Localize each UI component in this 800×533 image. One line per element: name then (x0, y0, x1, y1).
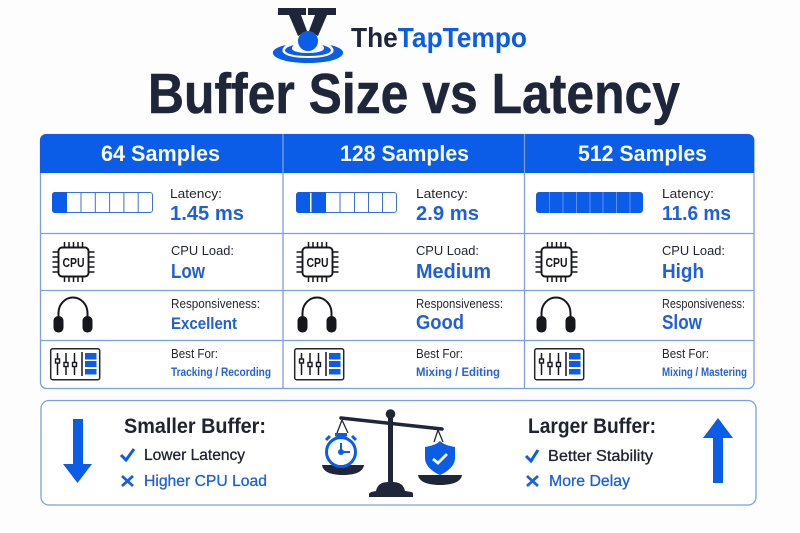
icon: headphones, 64 samples (54, 298, 92, 332)
panel: buffer trade-off summary (41, 400, 756, 505)
column header: 512 Samples: 512 Samples (578, 141, 707, 166)
cpu load text: 128 samples (416, 243, 491, 283)
cpu load text: 128 samples: CPU Load: (416, 243, 479, 258)
responsiveness text: 128 samples: Responsiveness: (416, 296, 503, 311)
responsiveness text: 64 samples: Responsiveness: (171, 296, 260, 311)
larger buffer text (526, 415, 656, 490)
logo mark (273, 8, 343, 63)
icon: mixer, 128 samples (295, 349, 344, 380)
best for text: 64 samples (171, 346, 271, 379)
responsiveness text: 512 samples: Slow (662, 312, 702, 334)
smaller buffer text: Lower Latency (144, 447, 245, 464)
cpu load text: 128 samples: Medium (416, 261, 491, 283)
best for text: 64 samples: Best For: (171, 346, 218, 361)
best for text: 512 samples: Best For: (662, 346, 709, 361)
larger buffer text: More Delay (549, 473, 630, 490)
column header: 128 Samples: 128 Samples (340, 141, 469, 166)
cpu load text: 64 samples: CPU Load: (171, 243, 234, 258)
right pan (418, 475, 462, 485)
icon: cpu chip, 128 samples: CPU (306, 255, 328, 270)
best for text: 64 samples: Tracking / Recording (171, 365, 271, 379)
best for text: 128 samples: Best For: (416, 346, 463, 361)
smaller buffer text: Higher CPU Load (144, 473, 267, 490)
best for text: 128 samples (416, 346, 500, 379)
icon: cpu chip, 512 samples: CPU (546, 255, 568, 270)
latency text: 512 samples (662, 186, 731, 225)
left pan (322, 465, 364, 475)
icon: shield with check (425, 441, 455, 475)
icon: balance scale (322, 409, 462, 497)
icon: headphones, 128 samples (298, 298, 336, 332)
icon: stopwatch (326, 433, 356, 466)
smaller buffer text (121, 415, 267, 490)
latency text: 64 samples: 1.45 ms (170, 203, 244, 225)
icon: mixer, 64 samples (51, 349, 100, 380)
latency text: 512 samples: 11.6 ms (662, 203, 731, 225)
arrow: up (703, 418, 733, 483)
icon: cross (527, 476, 538, 486)
responsiveness text: 64 samples: Excellent (171, 314, 237, 333)
logo (273, 8, 527, 63)
icon: cpu chip, 64 samples: CPU (62, 255, 84, 270)
cpu load text: 512 samples (662, 243, 725, 283)
responsiveness text: 512 samples: Responsiveness: (662, 296, 745, 311)
latency text: 64 samples (170, 186, 244, 225)
panel: comparison table (40, 134, 754, 388)
latency text: 512 samples: Latency: (662, 186, 714, 201)
column header: 64 Samples: 64 Samples (101, 141, 220, 166)
arrow: down (63, 419, 92, 483)
cpu load text: 64 samples: Low (171, 261, 205, 283)
icon: cpu chip, 512 samples (536, 242, 578, 282)
icon: mixer, 512 samples (535, 349, 584, 380)
latency text: 128 samples: 2.9 ms (416, 203, 479, 225)
responsiveness text: 128 samples (416, 296, 503, 334)
larger buffer text: Better Stability (548, 448, 653, 465)
responsiveness text: 512 samples (662, 296, 745, 334)
latency meter: 64 samples (52, 192, 152, 213)
latency text: 64 samples: Latency: (170, 186, 222, 201)
cpu load text: 512 samples: CPU Load: (662, 243, 725, 258)
best for text: 512 samples (662, 346, 747, 379)
cpu load text: 512 samples: High (662, 261, 704, 283)
best for text: 128 samples: Mixing / Editing (416, 365, 500, 379)
best for text: 512 samples: Mixing / Mastering (662, 365, 747, 379)
smaller buffer text: Smaller Buffer: (124, 415, 266, 438)
icon: cpu chip, 128 samples (296, 242, 338, 282)
cpu load text: 64 samples (171, 243, 234, 283)
logo wordmark: TheTapTempo (351, 22, 527, 53)
icon: cross (122, 476, 133, 486)
icon: cpu chip, 64 samples (52, 242, 94, 282)
responsiveness text: 128 samples: Good (416, 312, 464, 334)
latency text: 128 samples: Latency: (416, 186, 468, 201)
latency text: 128 samples (416, 186, 479, 225)
responsiveness text: 64 samples (171, 296, 260, 333)
icon: headphones, 512 samples (536, 298, 576, 332)
latency meter: 512 samples (536, 192, 643, 213)
icon: check (526, 450, 538, 461)
title: Buffer Size vs Latency (148, 62, 680, 126)
latency meter: 128 samples (296, 192, 396, 213)
larger buffer text: Larger Buffer: (528, 415, 656, 438)
icon: check (121, 449, 134, 460)
